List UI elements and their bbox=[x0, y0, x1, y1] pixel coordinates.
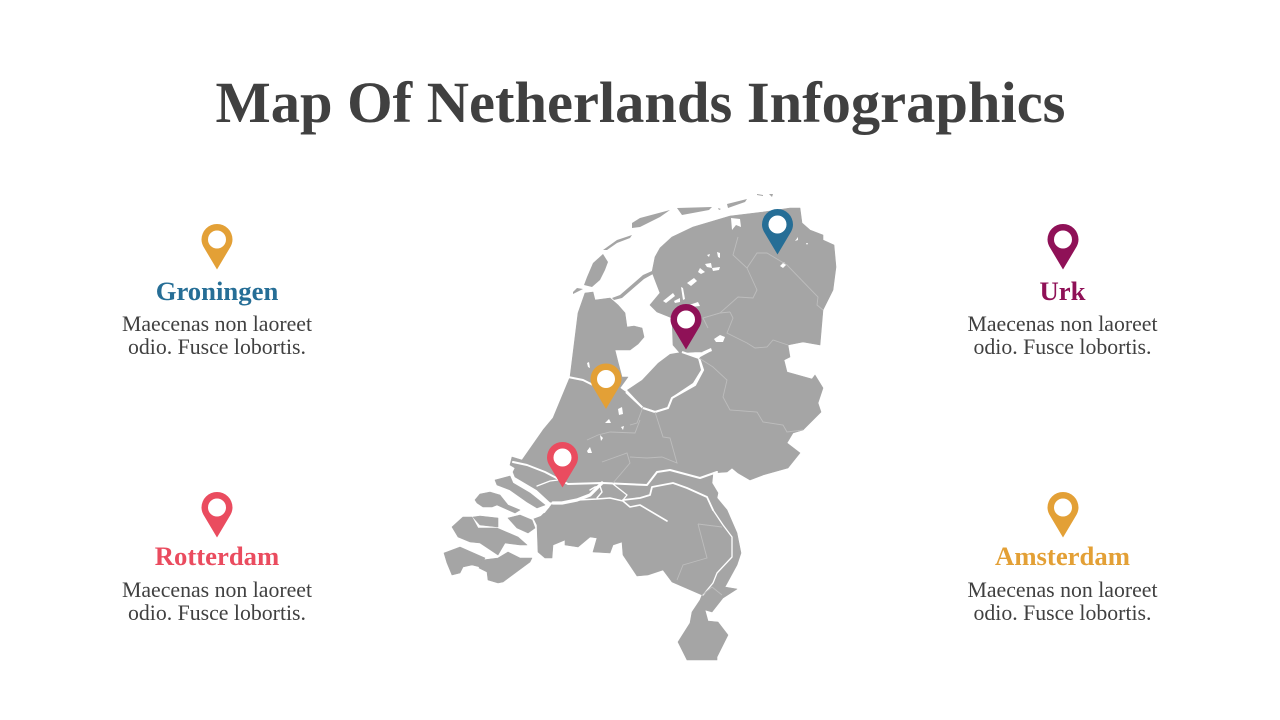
panel: Groningen bbox=[122, 224, 312, 359]
text: Urk description bbox=[967, 312, 1158, 359]
heading: Urk: Urk bbox=[1040, 276, 1085, 306]
rivers bbox=[513, 377, 732, 595]
panel: Rotterdam bbox=[122, 492, 312, 625]
mainland bbox=[510, 208, 836, 660]
Flevoland shore channel bbox=[626, 352, 703, 412]
pin: Groningen on map bbox=[762, 209, 793, 254]
text: Urk description: Maecenas non laoreet bbox=[967, 312, 1158, 336]
icon: red pin bbox=[202, 492, 232, 538]
heading: Groningen: Groningen bbox=[156, 276, 278, 306]
text: Amsterdam description: Maecenas non laoreet bbox=[967, 578, 1158, 602]
Flevoland bbox=[627, 352, 701, 411]
panel: Amsterdam bbox=[967, 492, 1158, 625]
icon: purple pin bbox=[1048, 224, 1078, 270]
text: Rotterdam description: odio. Fusce lobortis. bbox=[128, 601, 306, 625]
text: Groningen description: Maecenas non laoreet bbox=[122, 312, 312, 336]
text: Groningen description bbox=[122, 312, 312, 359]
Wadden islands bbox=[573, 194, 773, 294]
Afsluitdijk bbox=[612, 271, 653, 300]
text: Urk description: odio. Fusce lobortis. bbox=[973, 335, 1152, 359]
Zeeland islands bbox=[444, 476, 545, 583]
pin: Rotterdam on map bbox=[547, 442, 578, 488]
text: Groningen description: odio. Fusce lobortis. bbox=[128, 335, 306, 359]
province borders bbox=[587, 237, 823, 595]
title: Map Of Netherlands Infographics bbox=[216, 70, 1065, 135]
text: Amsterdam description bbox=[967, 578, 1158, 625]
pin: Urk on map bbox=[670, 304, 702, 350]
lakes bbox=[587, 218, 808, 453]
text: Amsterdam description: odio. Fusce lobortis. bbox=[973, 601, 1152, 625]
text: Rotterdam description bbox=[122, 578, 312, 625]
pin: Amsterdam on map bbox=[590, 364, 622, 409]
panel: Urk bbox=[967, 224, 1158, 359]
text: Rotterdam description: Maecenas non laoreet bbox=[122, 578, 312, 602]
map: land and waterways bbox=[444, 194, 836, 660]
heading: Rotterdam: Rotterdam bbox=[155, 541, 279, 571]
icon: orange pin bbox=[202, 224, 232, 270]
icon: orange pin bbox=[1048, 492, 1078, 538]
heading: Amsterdam: Amsterdam bbox=[995, 541, 1130, 571]
